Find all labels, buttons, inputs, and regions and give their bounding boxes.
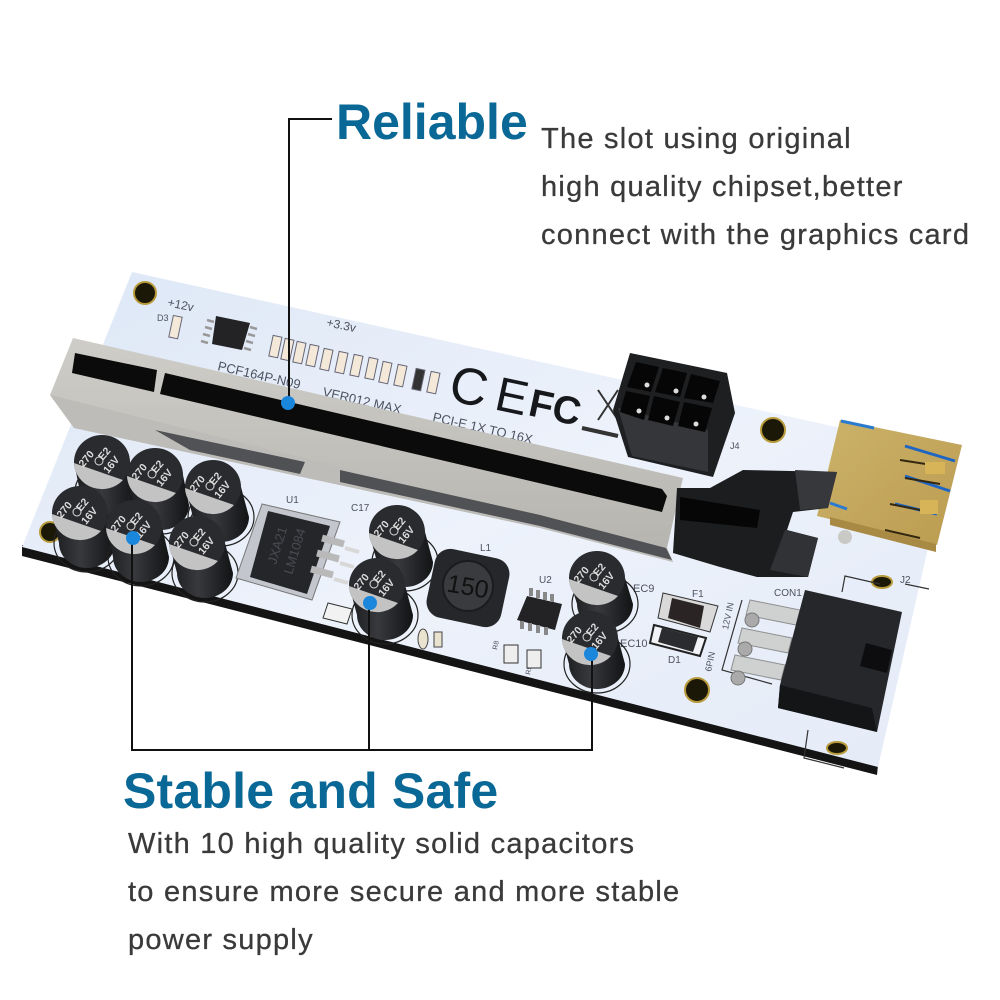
description: With 10 high quality solid capacitors [128,828,635,860]
certification logos: C [445,355,493,420]
capacitor 6: E2 [191,526,209,544]
heading: Reliable [336,94,528,150]
connector sockets [620,362,720,432]
capacitor 3 [185,460,254,546]
capacitor 5: 16V [133,519,154,541]
leader lines [132,538,592,750]
heading: Stable and Safe [123,763,498,819]
capacitor 7: 270 [371,518,392,540]
callout: Stable and Safe [123,531,680,956]
capacitor 7 [369,505,438,591]
status LEDs [169,315,440,394]
inductor L1: 150 [445,570,491,604]
capacitor 10: E2 [584,621,602,639]
certification logos: FC [525,382,585,435]
small resistors R15 [323,603,352,624]
chip U3 [201,316,257,350]
callout: Reliable [281,94,970,410]
silkscreen labels: 12V IN [720,601,736,630]
description: connect with the graphics card [541,219,970,251]
PCIe cable clip [673,470,837,577]
capacitor 3: E2 [207,470,225,488]
capacitor 10: 270 [564,624,585,646]
capacitor 8: 270 [351,571,372,593]
solid capacitors [52,435,638,693]
PCIe x16 slot [50,338,683,562]
description [541,123,970,251]
capacitor 6: 16V [196,535,217,557]
silkscreen labels: EC9 [633,583,654,595]
capacitor 5 [106,500,174,586]
silkscreen labels: CON1 [774,588,802,599]
slot openings [72,353,667,512]
description: high quality chipset,better [541,171,904,203]
silkscreen labels: PCI-E 1X TO 16X [431,409,535,447]
riser board [22,272,950,775]
silkscreen labels: PCF164P-N09 [216,358,302,392]
capacitor 4: 270 [54,499,75,521]
capacitor 7: E2 [391,515,409,533]
capacitor 6: 270 [171,529,192,551]
certification logos: E [491,368,533,426]
silkscreen labels: EC10 [620,638,648,650]
slot reflections [155,430,672,560]
board outlines right side [722,576,929,768]
description: power supply [128,924,314,956]
capacitor 5: E2 [128,510,146,528]
capacitor 4 [52,486,120,572]
capacitor 5: 270 [108,513,129,535]
silkscreen labels: +3.3v [325,315,357,335]
capacitor 7: 16V [396,524,417,546]
marker dots [126,531,598,661]
silkscreen labels: R8 [492,640,501,650]
port contacts [895,446,955,514]
inductor L1 [424,546,512,630]
capacitor 9 [569,551,638,633]
capacitor 2 [127,448,194,534]
capacitor 6 [169,516,238,602]
silkscreen labels: U1 [286,495,299,506]
capacitor 3: 16V [212,479,233,501]
silkscreen labels: +12v [166,295,195,314]
capacitor 10: 16V [589,630,610,652]
capacitor 8 [349,558,418,644]
USB 3.0 port [817,420,962,552]
capacitor 10 [562,611,630,693]
capacitor 9: 270 [571,564,592,586]
silkscreen labels [157,295,911,675]
capacitor 2: 270 [129,461,150,483]
capacitor 1 [74,435,141,521]
capacitor 1: E2 [96,445,114,463]
capacitor 1: 16V [101,454,122,476]
silkscreen labels: U2 [539,575,552,586]
leader line [289,119,332,403]
silkscreen labels: D1 [668,655,681,666]
marker dot [281,396,295,410]
capacitor 2: 16V [154,467,175,489]
certification logos [445,355,585,435]
capacitor 9: 16V [596,570,617,592]
J4 six-pin connector [613,353,735,477]
silkscreen labels: L1 [480,543,492,554]
silkscreen labels: F1 [692,589,704,600]
description: to ensure more secure and more stable [128,876,680,908]
regulator U1 [236,504,359,624]
capacitor 1: 270 [76,448,97,470]
capacitor 4: 16V [79,505,100,527]
capacitor 8: E2 [371,568,389,586]
silkscreen labels: D3 [157,313,169,323]
capacitor 4: E2 [74,496,92,514]
capacitor 9: E2 [591,561,609,579]
silkscreen labels: R9 C9 [525,654,536,675]
silkscreen labels: C17 [351,503,370,514]
capacitor 3: 270 [187,473,208,495]
capacitor 2: E2 [149,458,167,476]
silkscreen labels: 6PIN [703,651,717,672]
metal pins [731,600,800,680]
small passives C3 [418,629,442,649]
fuse F1 and diode D1 [650,593,718,656]
regulator U1: JXA21 [265,525,290,566]
description: The slot using original [541,123,852,155]
capacitor 8: 16V [376,577,397,599]
description [128,828,680,956]
regulator U1: LM1084 [281,527,309,576]
mounting holes [40,282,892,754]
silkscreen labels: J4 [730,441,740,451]
chip U2 [504,588,562,668]
silkscreen labels: VER012 MAX [321,384,403,417]
recycle mark [582,390,618,436]
silkscreen labels: J2 [900,575,911,586]
connector pins [636,382,706,426]
CON1 power connector [731,590,902,732]
